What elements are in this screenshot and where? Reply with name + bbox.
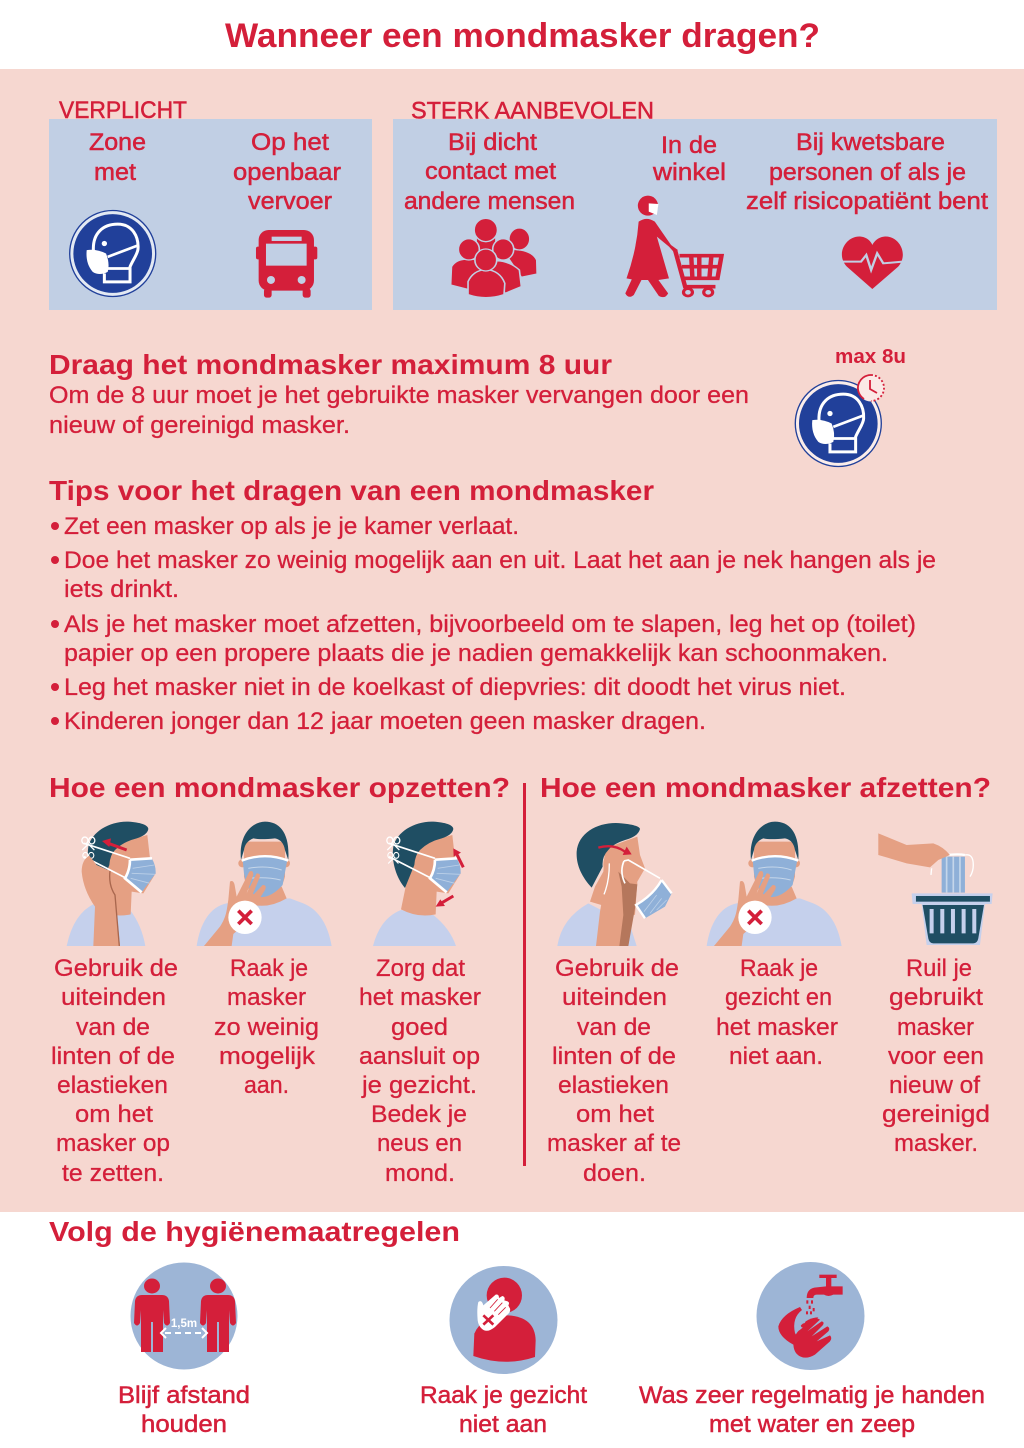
- hygiene item: do not touch face: [420, 1266, 587, 1438]
- step texts: take off 1: elastieken: [558, 1072, 669, 1099]
- step texts: take off 3: masker: [897, 1014, 974, 1041]
- text: op het openbaar vervoer: Op het: [251, 129, 329, 156]
- bullet list: tips: papier op een propere plaats die je nadien gemakkelijk kan schoonmaken.: [64, 640, 888, 667]
- text: vervangen: [49, 382, 749, 439]
- blue box: sterk aanbevolen: [393, 119, 997, 310]
- label: raak je gezicht: [420, 1382, 587, 1438]
- bullet list: tips: [51, 513, 936, 735]
- step texts: put on 2: aan.: [244, 1072, 289, 1099]
- text: bij dicht contact: andere mensen: [404, 188, 575, 215]
- step texts: take off 1: doen.: [583, 1160, 646, 1187]
- step texts: put on 1: uiteinden: [61, 984, 166, 1011]
- bullet list: tips: Kinderen jonger dan 12 jaar moeten geen masker dragen.: [64, 708, 706, 735]
- step texts: put on 3: goed: [391, 1014, 448, 1041]
- icon: group of people: [451, 218, 537, 298]
- step texts: put on 1: linten of de: [51, 1043, 175, 1070]
- step texts: take off 1: masker af te: [547, 1130, 681, 1157]
- step texts: put on 3: Bedek je: [371, 1101, 467, 1128]
- text: bij dicht contact: [404, 129, 575, 215]
- icon: bus: [256, 230, 317, 298]
- step texts: put on 1: te zetten.: [62, 1160, 164, 1187]
- step texts: take off 1: [547, 955, 681, 1187]
- title: Wanneer een mondmasker dragen?: [225, 17, 820, 55]
- label: blijf afstand: Blijf afstand: [118, 1382, 250, 1409]
- step: put on 1 illustration: [67, 822, 156, 946]
- text: kwetsbare personen: [746, 129, 988, 215]
- bullet list: tips: Zet een masker op als je je kamer verlaat.: [64, 513, 519, 540]
- panel: pink background: [0, 69, 1024, 1212]
- label: blijf afstand: houden: [141, 1411, 227, 1438]
- heading: opzetten: Hoe een mondmasker opzetten?: [49, 772, 510, 803]
- text: in de winkel: winkel: [652, 159, 726, 186]
- step texts: take off 2: [716, 955, 838, 1070]
- text: op het openbaar vervoer: vervoer: [248, 188, 332, 215]
- step texts: put on 3: het masker: [359, 984, 481, 1011]
- text: op het openbaar vervoer: [233, 129, 341, 215]
- icon: heart with pulse: [842, 237, 903, 289]
- step texts: put on 2: [214, 955, 319, 1099]
- icon: face touch: [449, 1266, 557, 1374]
- text: vervangen: nieuw of gereinigd masker.: [49, 412, 350, 439]
- blue box: verplicht: [49, 119, 372, 310]
- text: in de winkel: [652, 132, 726, 186]
- step texts: take off 3: Ruil je: [906, 955, 972, 982]
- step: take off 2 illustration: [707, 822, 842, 946]
- bullet list: tips: Leg het masker niet in de koelkast of diepvries: dit doodt het virus niet.: [64, 674, 846, 701]
- panel: verplicht: [49, 97, 372, 310]
- step texts: take off 2: Raak je: [740, 955, 818, 982]
- step texts: take off 2: gezicht en: [725, 984, 832, 1011]
- heading: hygiene: Volg de hygiënemaatregelen: [49, 1216, 460, 1247]
- step texts: put on 1: elastieken: [57, 1072, 168, 1099]
- label: blijf afstand: [118, 1382, 250, 1438]
- text: in de winkel: In de: [661, 132, 717, 159]
- step: put on 2 illustration: [197, 822, 332, 946]
- hygiene item: wash hands: [639, 1262, 985, 1438]
- step texts: put on 3: [359, 955, 481, 1187]
- step texts: put on 1: Gebruik de: [54, 955, 178, 982]
- hygiene item: distance: [118, 1262, 250, 1438]
- step texts: put on 3: neus en: [377, 1130, 462, 1157]
- step texts: put on 2: zo weinig: [214, 1014, 319, 1041]
- step texts: put on 3: je gezicht.: [361, 1072, 477, 1099]
- text: bij dicht contact: contact met: [425, 158, 556, 185]
- step texts: take off 1: uiteinden: [562, 984, 667, 1011]
- step texts: take off 3: masker.: [894, 1130, 978, 1157]
- step texts: put on 1: van de: [76, 1014, 150, 1041]
- text: zone met: met: [94, 159, 136, 186]
- step texts: take off 1: van de: [577, 1014, 651, 1041]
- step texts: take off 1: om het: [576, 1101, 654, 1128]
- step texts: take off 3: gebruikt: [889, 984, 983, 1011]
- label: raak je gezicht: Raak je gezicht: [420, 1382, 587, 1409]
- icon: distance: [130, 1262, 238, 1370]
- heading: afzetten: Hoe een mondmasker afzetten?: [540, 772, 991, 803]
- icon: shopper with cart: [625, 196, 722, 297]
- label: was je handen: [639, 1382, 985, 1438]
- step texts: put on 1: om het: [75, 1101, 153, 1128]
- heading: draag het mondmasker: Draag het mondmasker maximum 8 uur: [49, 349, 612, 380]
- step texts: take off 3: voor een: [888, 1043, 984, 1070]
- bullet list: tips: Doe het masker zo weinig mogelijk aan en uit. Laat het aan je nek hangen als je: [64, 547, 936, 574]
- step texts: put on 3: Zorg dat: [376, 955, 465, 982]
- step: take off 1 illustration: [557, 823, 672, 946]
- text: op het openbaar vervoer: openbaar: [233, 159, 341, 186]
- step texts: put on 3: mond.: [385, 1160, 455, 1187]
- panel: sterk aanbevolen: [393, 98, 997, 310]
- label: was je handen: met water en zeep: [709, 1411, 915, 1438]
- text: kwetsbare personen: Bij kwetsbare: [796, 129, 945, 156]
- label: was je handen: Was zeer regelmatig je handen: [639, 1382, 985, 1409]
- icon: distance: 1,5m: [171, 1318, 197, 1330]
- step texts: take off 3: [882, 955, 990, 1157]
- text: zone met: [89, 129, 146, 186]
- text: vervangen: Om de 8 uur moet je het gebruikte masker vervangen door een: [49, 382, 749, 409]
- step texts: take off 2: niet aan.: [729, 1043, 823, 1070]
- section: maximum 8 uur: [49, 346, 906, 466]
- heading: verplicht: VERPLICHT: [59, 97, 187, 124]
- step texts: put on 2: Raak je: [230, 955, 308, 982]
- section: tips: [49, 475, 936, 735]
- divider: vertical red line: [523, 783, 526, 1166]
- heading: tips: Tips voor het dragen van een mondmasker: [49, 475, 654, 506]
- step texts: put on 2: masker: [227, 984, 306, 1011]
- icon: mask pictogram with clock: [795, 374, 884, 466]
- step texts: put on 1: [51, 955, 178, 1187]
- step texts: take off 3: gereinigd: [882, 1101, 990, 1128]
- label: raak je gezicht: niet aan: [459, 1411, 547, 1438]
- text: kwetsbare personen: zelf risicopatiënt bent: [746, 188, 988, 215]
- step texts: take off 1: Gebruik de: [555, 955, 679, 982]
- step: put on 3 illustration: [373, 822, 463, 946]
- text: zone met: Zone: [89, 129, 146, 156]
- step: take off 3 illustration: [878, 833, 993, 945]
- step texts: take off 1: linten of de: [552, 1043, 676, 1070]
- heading: sterk aanbevolen: STERK AANBEVOLEN: [411, 98, 654, 124]
- step texts: put on 3: aansluit op: [359, 1043, 480, 1070]
- bullet list: tips: Als je het masker moet afzetten, bijvoorbeeld om te slapen, leg het op (toilet): [64, 611, 916, 638]
- icon: washing hands: [756, 1262, 864, 1370]
- step texts: put on 2: mogelijk: [219, 1043, 316, 1070]
- step texts: take off 2: het masker: [716, 1014, 838, 1041]
- icon: mask pictogram: [70, 211, 156, 296]
- text: kwetsbare personen: personen of als je: [769, 159, 966, 186]
- step texts: put on 1: masker op: [56, 1130, 170, 1157]
- step texts: take off 3: nieuw of: [889, 1072, 980, 1099]
- text: bij dicht contact: Bij dicht: [448, 129, 537, 156]
- bullet list: tips: iets drinkt.: [64, 576, 179, 603]
- label: max 8u: max 8u: [835, 346, 906, 368]
